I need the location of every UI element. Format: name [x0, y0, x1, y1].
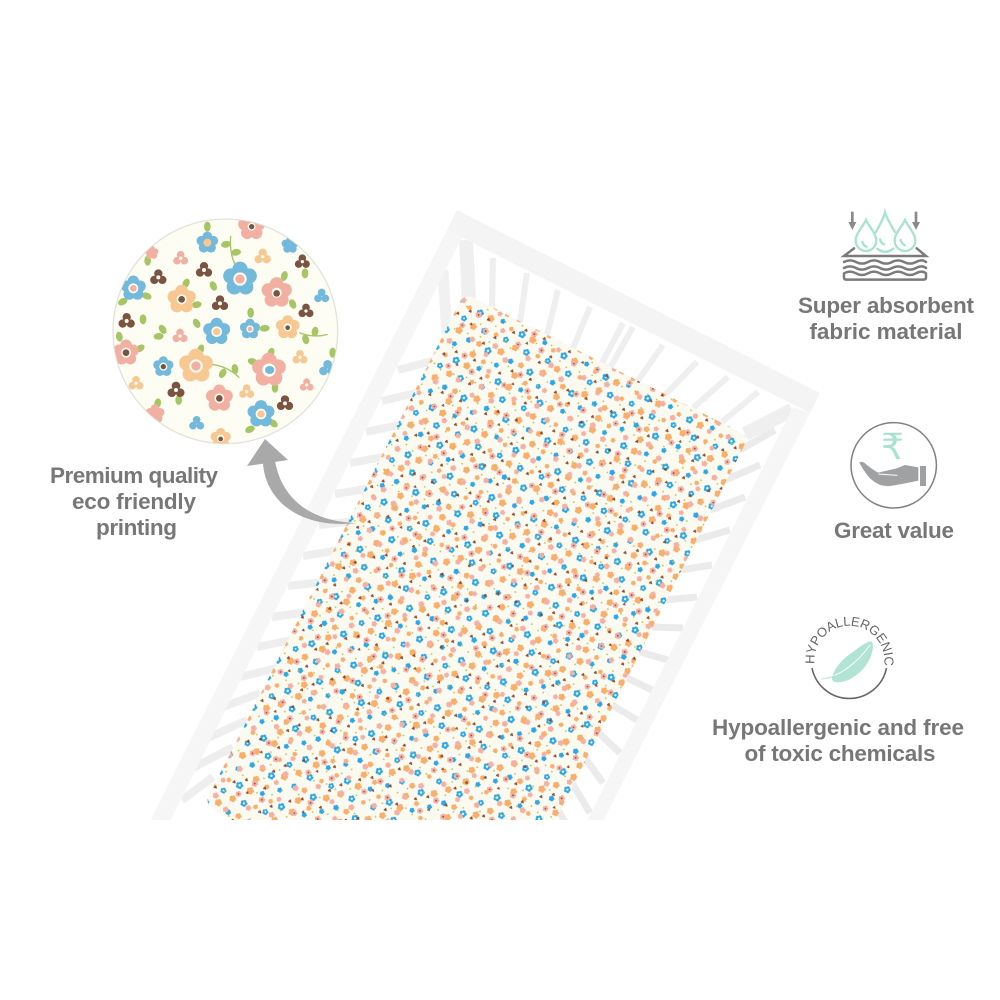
text: premium quality printing: eco friendly	[72, 489, 196, 514]
orange flowers	[129, 249, 307, 448]
text: super absorbent	[798, 293, 974, 344]
water drops	[856, 212, 915, 252]
mattress layers	[844, 248, 926, 280]
stems	[212, 236, 328, 378]
text: hypoallergenic	[712, 715, 964, 766]
zoomed fabric circle	[113, 213, 338, 448]
text: hypoallergenic: Hypoallergenic and free	[712, 715, 964, 740]
flower centres	[121, 223, 292, 442]
icon: hypoallergenic	[805, 616, 894, 700]
text: premium quality printing: Premium quality	[50, 463, 218, 488]
crib with fitted sheet	[148, 210, 820, 825]
icon: great value	[851, 423, 936, 508]
crib top slats	[466, 240, 758, 422]
brown clovers	[119, 254, 313, 410]
arrow from sheet to circle	[247, 439, 358, 524]
lower arc	[812, 668, 886, 698]
clover centres	[125, 255, 308, 405]
leaves	[115, 222, 336, 434]
crib left slats	[182, 270, 447, 800]
text: great value: Great value	[834, 518, 954, 543]
blue flowers	[121, 232, 336, 429]
feather	[822, 642, 873, 682]
text: super absorbent: fabric material	[810, 319, 962, 344]
rupee symbol: ₹	[881, 427, 904, 468]
fitted sheet with floral print	[208, 296, 746, 825]
hand	[859, 462, 926, 486]
text: premium quality printing	[50, 463, 218, 540]
crib rails	[148, 210, 820, 825]
down arrows	[848, 212, 920, 230]
crib right slats	[558, 410, 792, 822]
circular text: HYPOALLERGENIC	[805, 616, 894, 666]
icon: absorbent fabric	[844, 212, 926, 280]
text: premium quality printing: printing	[96, 515, 177, 540]
text: super absorbent: Super absorbent	[798, 293, 974, 318]
text: hypoallergenic: of toxic chemicals	[744, 741, 936, 766]
pink flowers	[113, 213, 313, 423]
